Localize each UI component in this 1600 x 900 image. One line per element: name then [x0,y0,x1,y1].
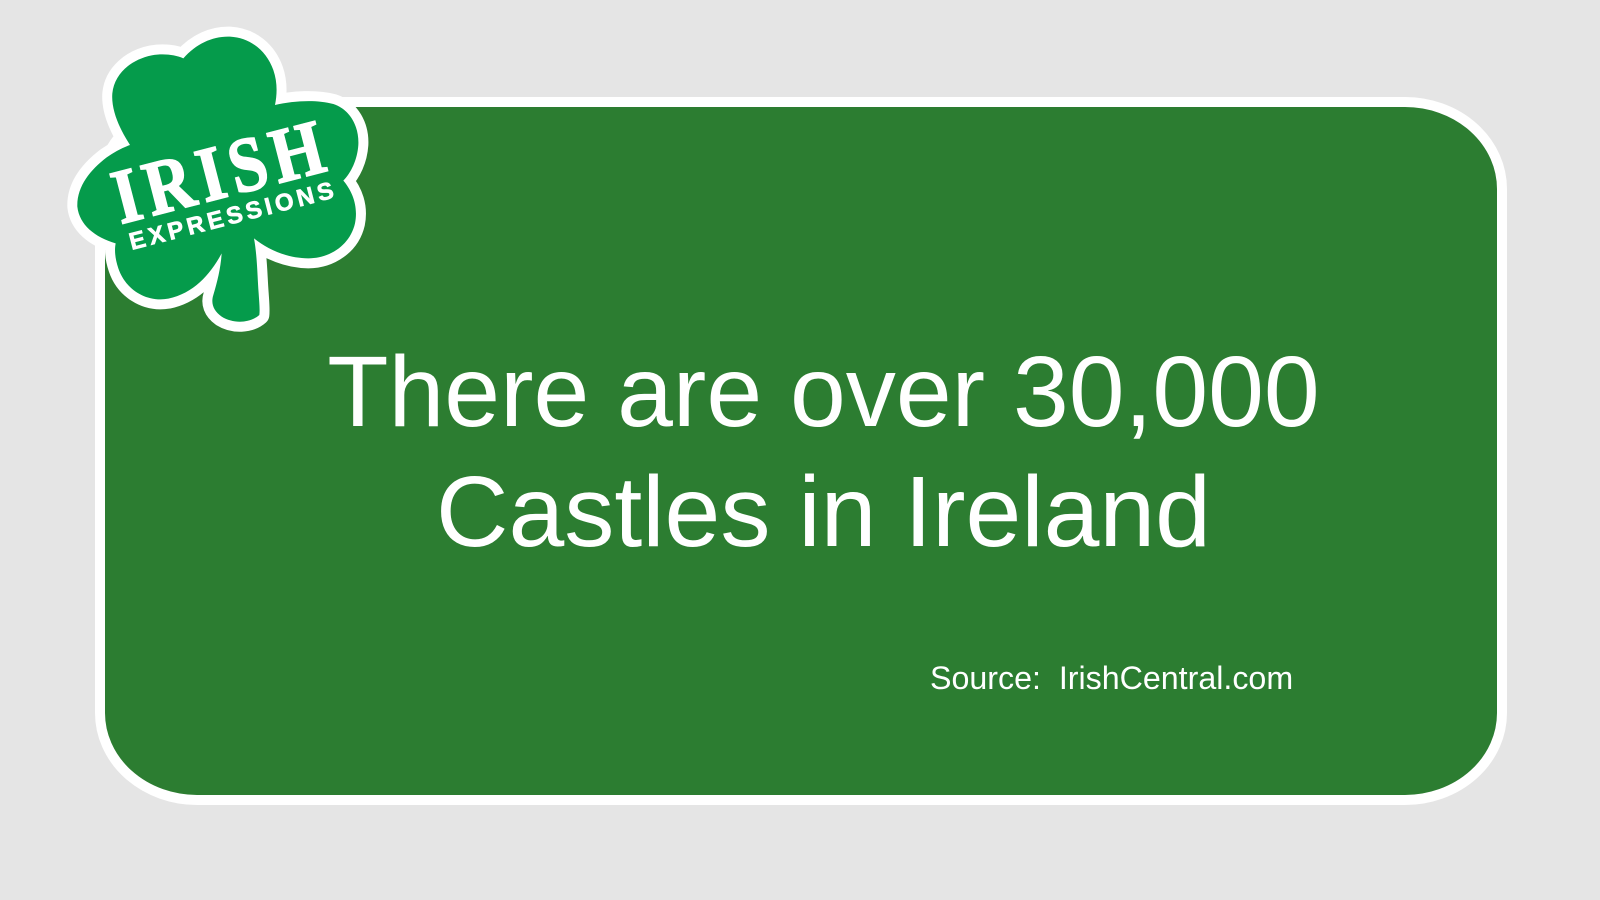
icon: shamrock logo [77,37,358,322]
logo word: IRISH: IRISH [103,104,333,241]
source text: Source: IrishCentral.com [930,660,1293,696]
headline text [327,336,1320,568]
headline text: Castles in Ireland [436,456,1211,568]
panel: green rounded card [100,102,1502,800]
logo word: EXPRESSIONS: EXPRESSIONS [126,177,336,256]
headline text: There are over 30,000 [327,336,1320,448]
shamrock shape [77,37,358,322]
